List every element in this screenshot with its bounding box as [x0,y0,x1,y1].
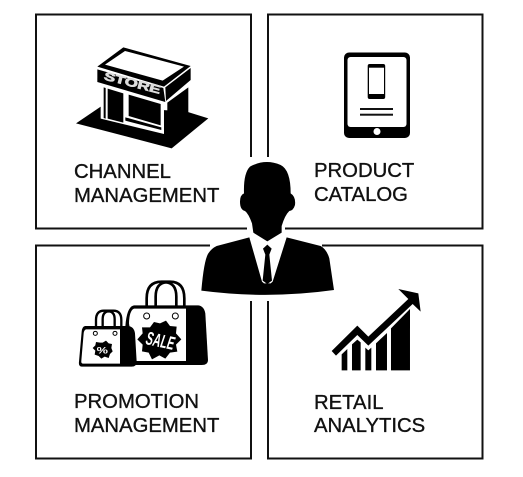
suit [201,237,334,295]
label: retail analytics: RETAIL [314,392,384,414]
icon: shopping bags [79,282,208,367]
halo behind businessman [210,157,322,301]
panel: promotion management [36,246,251,458]
label: product catalog: PRODUCT [314,160,414,182]
label: promotion management: PROMOTION [74,391,199,413]
icon: shopping bags: % [97,345,109,355]
icon: businessman [201,162,334,295]
icon: store [76,47,208,148]
head [240,162,295,241]
tie [263,245,272,284]
label: product catalog: CATALOG [314,184,408,206]
panel: retail analytics [268,246,482,458]
label: retail analytics: ANALYTICS [314,415,425,437]
icon: shopping bags: SALE [144,327,177,354]
label: channel management: MANAGEMENT [74,185,219,207]
label: channel management: CHANNEL [74,161,171,183]
panel: product catalog [268,14,482,228]
icon: growth chart [332,289,421,370]
label: promotion management: MANAGEMENT [74,415,219,437]
panel: channel management [36,14,251,228]
icon: tablet [344,52,410,138]
icon: store: STORE [103,71,162,97]
